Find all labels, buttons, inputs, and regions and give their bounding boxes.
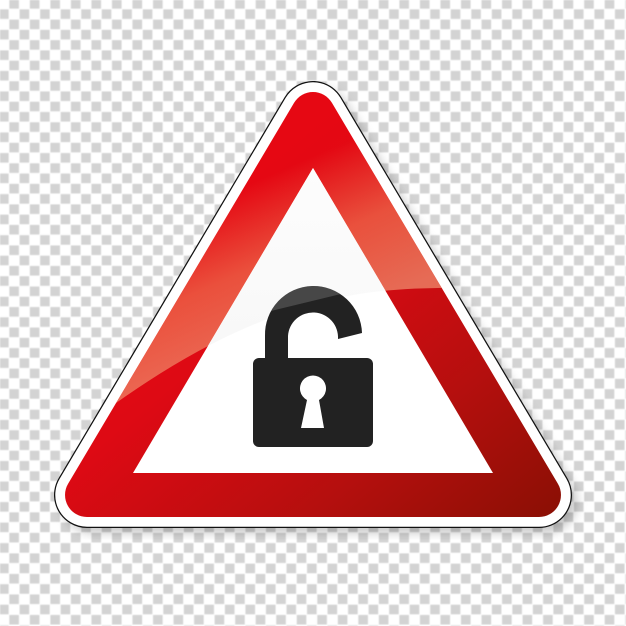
sign drop shadow xyxy=(93,120,545,501)
shackle gloss xyxy=(271,286,340,311)
gloss highlight on red band xyxy=(116,147,442,403)
keyhole xyxy=(300,375,326,428)
icon: open padlock xyxy=(253,270,373,447)
sign black outline xyxy=(87,114,539,495)
sign white border xyxy=(87,114,539,495)
padlock body xyxy=(253,358,373,447)
red triangle band xyxy=(65,92,561,517)
warning sign xyxy=(60,70,561,517)
padlock shackle xyxy=(265,286,362,360)
white inner triangle xyxy=(133,168,493,473)
faint gloss on white triangle xyxy=(208,168,386,346)
